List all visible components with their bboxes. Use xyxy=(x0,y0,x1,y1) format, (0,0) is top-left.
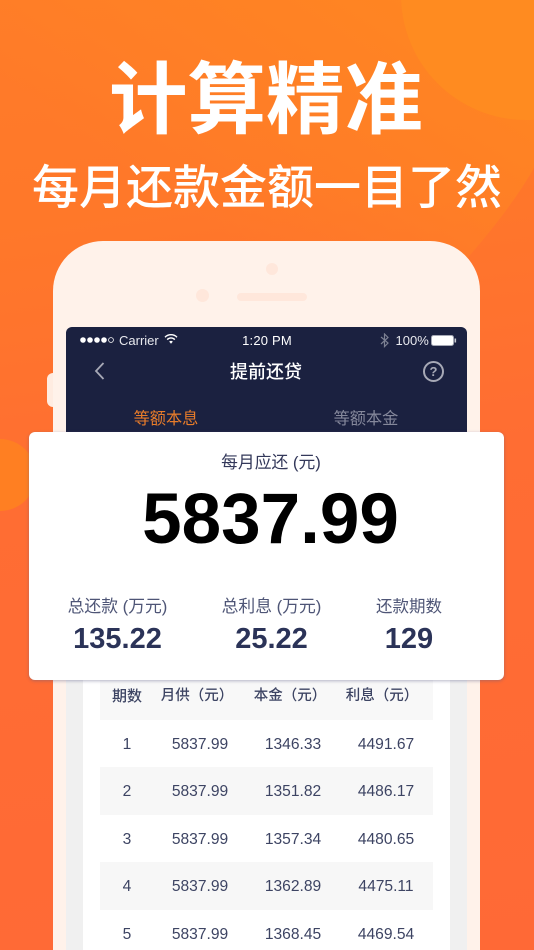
decorative circle: top right xyxy=(401,0,534,120)
row 2: 5837.99 xyxy=(172,783,228,800)
decorative circle: left xyxy=(0,439,36,511)
icon: back chevron xyxy=(94,362,104,380)
tab: active: 等额本息 xyxy=(134,410,198,428)
decorative shape: large arc xyxy=(286,0,534,220)
row 3: 5837.99 xyxy=(172,831,228,848)
row 1: 1346.33 xyxy=(265,736,321,753)
stat: total interest xyxy=(222,597,321,655)
icon: phone side button xyxy=(46,373,60,407)
row 1 xyxy=(123,736,414,753)
icon: bluetooth xyxy=(380,333,389,348)
row 5: 1368.45 xyxy=(265,926,321,943)
table header: 期数 xyxy=(112,688,142,705)
stat: total repayment xyxy=(68,597,167,655)
stat label: 总还款 (万元) xyxy=(68,597,167,616)
phone front lens xyxy=(196,289,208,302)
time: 1:20 PM xyxy=(242,333,292,348)
row 5: 4469.54 xyxy=(358,926,414,943)
table header: 本金（元） xyxy=(254,688,326,704)
icon: battery xyxy=(431,335,456,346)
app screen xyxy=(66,327,467,950)
status bar xyxy=(80,333,456,348)
row 2: 2 xyxy=(123,783,131,800)
row 2: 4486.17 xyxy=(358,783,414,800)
table header: 月供（元） xyxy=(161,688,233,704)
row 5: 5 xyxy=(123,926,131,943)
row 5: 5837.99 xyxy=(172,926,228,943)
row 4: 5837.99 xyxy=(172,878,228,895)
row 1: 4491.67 xyxy=(358,736,414,753)
row 3 xyxy=(123,831,414,848)
tab: inactive: 等额本金 xyxy=(334,410,398,428)
carrier: Carrier xyxy=(119,333,159,348)
icon: help xyxy=(423,361,444,382)
icon: wifi xyxy=(164,334,178,344)
subtitle: 每月还款金额一目了然 xyxy=(32,161,502,214)
signal dots xyxy=(80,337,114,343)
stat value: 25.22 xyxy=(235,623,308,655)
result card xyxy=(29,432,504,680)
stat value: 129 xyxy=(385,623,433,655)
row 5 xyxy=(123,926,414,943)
app header xyxy=(66,327,467,437)
title: 计算精准 xyxy=(109,56,423,144)
table header: 利息（元） xyxy=(346,688,418,704)
row 3: 4480.65 xyxy=(358,831,414,848)
monthly amount: 5837.99 xyxy=(142,480,399,559)
stat value: 135.22 xyxy=(73,623,162,655)
card label: 每月应还 (元) xyxy=(221,453,321,472)
row 4: 4475.11 xyxy=(358,878,414,895)
row 1: 1 xyxy=(123,736,131,753)
content panel xyxy=(83,437,450,950)
icon: help: ? xyxy=(430,364,437,379)
phone camera xyxy=(266,263,278,275)
row 2: 1351.82 xyxy=(265,783,321,800)
table xyxy=(112,687,418,943)
phone speaker xyxy=(237,293,307,301)
row 4: 1362.89 xyxy=(265,878,321,895)
row 4 xyxy=(100,862,433,910)
row 1: 5837.99 xyxy=(172,736,228,753)
row 3: 1357.34 xyxy=(265,831,321,848)
stat label: 还款期数 xyxy=(376,598,442,616)
stat: number of terms xyxy=(376,598,442,655)
row 2 xyxy=(100,767,433,815)
stat label: 总利息 (万元) xyxy=(222,597,321,616)
row 3: 3 xyxy=(123,831,131,848)
battery percent: 100% xyxy=(396,333,429,348)
phone body xyxy=(53,241,480,950)
page title: 提前还贷 xyxy=(230,362,302,382)
table header xyxy=(100,680,433,720)
row 4: 4 xyxy=(123,878,131,895)
